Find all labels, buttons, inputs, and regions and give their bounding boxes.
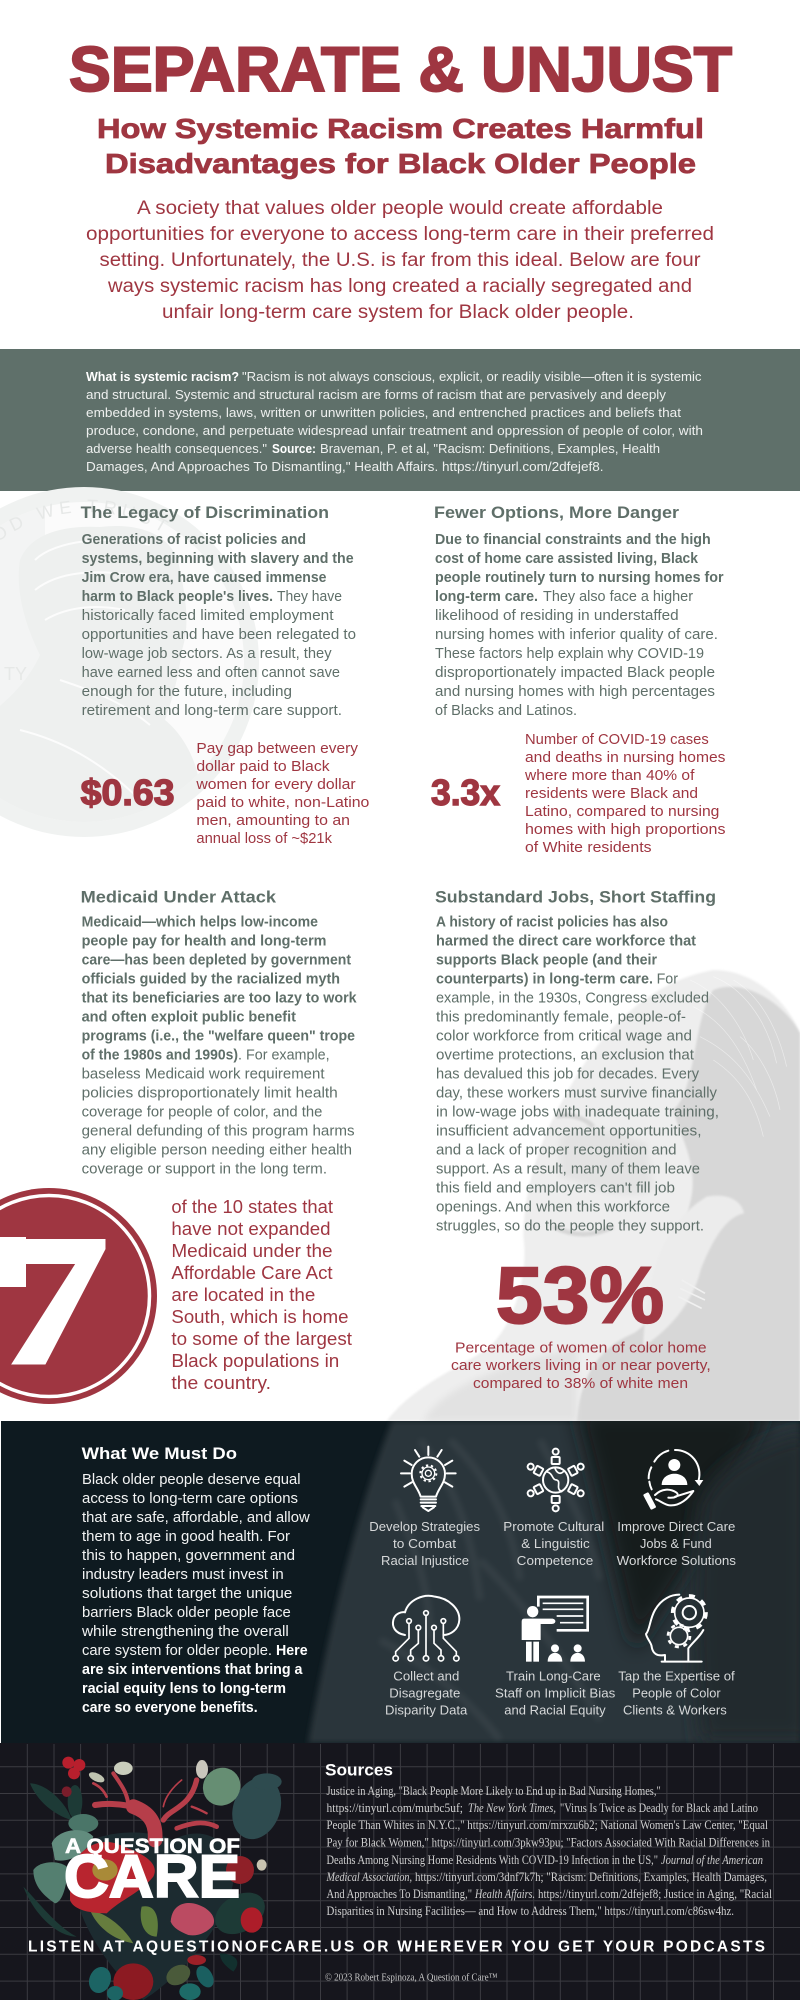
body text: harm to Black people's lives.: [82, 589, 273, 605]
body text: has devalued this job for decades. Every: [436, 1066, 700, 1082]
icon: light bulb with gear: [401, 1447, 456, 1511]
body text: people routinely turn to nursing homes for: [435, 570, 724, 586]
stat: pay gap: women for every dollar: [195, 777, 356, 793]
body text: officials guided by the racialized myth: [82, 972, 340, 988]
body text: . For example,: [238, 1048, 330, 1064]
body text: [436, 914, 719, 1234]
body text: insufficient advancement opportunities,: [436, 1124, 702, 1140]
stat text: states not expanded: are located in the: [171, 1285, 315, 1305]
panel: what is systemic racism: "Racism is not always conscious, explicit, or readily visible—often it is systemic: [242, 370, 702, 384]
panel: what is systemic racism: adverse health consequences.": [86, 442, 267, 456]
sources text: And Approaches To Dismantling,": [326, 1887, 472, 1901]
body text: example, in the 1930s, Congress excluded: [436, 990, 709, 1006]
illustration: woman photo background: [387, 970, 800, 1421]
panel: what is systemic racism: and structural. Systemic and structural racism are forms of racism that are pervasively and deeply: [86, 388, 667, 402]
body text: this predominantly female, people-of-: [436, 1010, 686, 1026]
body text: of the 1980s and 1990s): [82, 1048, 238, 1064]
body text: They have: [277, 589, 342, 605]
body text: [82, 532, 356, 719]
stat: pay gap: annual loss of ~$21k: [196, 831, 333, 847]
icon labels: [369, 1519, 737, 1718]
sources text: Health Affairs.: [474, 1887, 535, 1901]
body text: and nursing homes with high percentages: [435, 684, 715, 700]
body text: [82, 914, 358, 1178]
body text: disproportionately impacted Black people: [435, 665, 715, 681]
body text: openings. And when this workforce: [436, 1200, 670, 1216]
stat: 7 badge: [0, 1188, 157, 1404]
call to action: LISTEN AT AQUESTIONOFCARE.US OR WHEREVER YOU GET YOUR PODCASTS: [28, 1939, 765, 1956]
icon labels: Staff on Implicit Bias: [495, 1686, 616, 1701]
body text: They also face a higher: [543, 589, 693, 605]
panel: what is systemic racism: [0, 349, 800, 491]
stat: covid cases: homes with high proportions: [525, 822, 726, 838]
icon labels: Collect and: [393, 1669, 459, 1684]
body text: low-wage job sectors. As a result, they: [82, 646, 332, 662]
icon labels: and Racial Equity: [504, 1703, 606, 1718]
stat caption: [451, 1340, 711, 1392]
subtitle: Disadvantages for Black Older People: [105, 148, 696, 179]
body text: For: [657, 972, 678, 988]
photo: shoulder background: [308, 1410, 800, 1743]
body text: in low-wage jobs with inadequate training,: [436, 1104, 719, 1120]
panel: what is systemic racism: Damages, And Approaches To Dismantling," Health Affairs. https://tinyurl.com/2dfejef8.: [86, 460, 604, 474]
body text: coverage for people of color, and the: [82, 1104, 322, 1120]
panel: footer: [0, 1743, 800, 2000]
body text: These factors help explain why COVID-19: [435, 646, 704, 662]
sources: [325, 1761, 772, 1918]
body text: barriers Black older people face: [82, 1605, 291, 1621]
stat text: states not expanded: [171, 1197, 352, 1393]
icon grid: [393, 1447, 706, 1662]
body text: historically faced limited employment: [82, 608, 334, 624]
stat: covid cases: and deaths in nursing homes: [525, 750, 726, 766]
body text: industry leaders must invest in: [82, 1567, 284, 1583]
icon labels: Clients & Workers: [623, 1703, 727, 1718]
body text: Generations of racist policies and: [82, 532, 306, 548]
panel: what is systemic racism: What is systemic racism?: [86, 370, 239, 384]
body text: Black older people deserve equal: [82, 1472, 300, 1488]
stat text: states not expanded: have not expanded: [171, 1219, 331, 1239]
section: the legacy of discrimination: [81, 504, 369, 847]
sources text: https://tinyurl.com/2dfejef8; Justice in Aging, "Racial: [538, 1887, 772, 1901]
stat caption: compared to 38% of white men: [473, 1376, 688, 1392]
body text: coverage or support in the long term.: [82, 1162, 327, 1178]
body text: long-term care.: [435, 589, 538, 605]
icon labels: Disparity Data: [385, 1703, 468, 1718]
icon labels: Develop Strategies: [369, 1519, 480, 1534]
intro paragraph: setting. Unfortunately, the U.S. is far from this ideal. Below are four: [100, 250, 701, 271]
body text: policies disproportionately limit health: [82, 1086, 338, 1102]
illustration: penny background: TY: [4, 664, 27, 684]
sources text: Justice in Aging, "Black People More Likely to End up in Bad Nursing Homes,": [326, 1784, 661, 1798]
heading: The Legacy of Discrimination: [81, 504, 329, 522]
body text: opportunities and have been relegated to: [82, 627, 356, 643]
body text: any eligible person needing either health: [82, 1142, 352, 1158]
body text: likelihood of residing in understaffed: [435, 608, 679, 624]
body text: people pay for health and long-term: [82, 934, 326, 950]
stat: covid cases: Number of COVID-19 cases: [525, 732, 709, 748]
sources heading: Sources: [325, 1761, 393, 1780]
icon: globe with people: [526, 1449, 585, 1511]
body text: overtime protections, an exclusion that: [436, 1048, 694, 1064]
body text: racial equity lens to long-term: [82, 1681, 286, 1697]
body text: that its beneficiaries are too lazy to work: [82, 990, 358, 1006]
sources text: [326, 1784, 772, 1918]
body text: care system for older people.: [82, 1643, 272, 1659]
subtitle: How Systemic Racism Creates Harmful: [97, 113, 704, 144]
stat: covid cases: 3.3x: [431, 772, 500, 813]
body text: harmed the direct care workforce that: [436, 934, 696, 950]
icon labels: Disagregate: [389, 1686, 460, 1701]
intro paragraph: unfair long-term care system for Black older people.: [162, 302, 634, 323]
logo: a question of care: CARE: [64, 1843, 240, 1910]
sources text: Disparities in Nursing Facilities— and How to Address Them," https://tinyurl.com/c86sw4hz.: [326, 1904, 734, 1918]
stat: covid cases: [431, 732, 726, 856]
stat: covid cases: Latino, compared to nursing: [525, 804, 719, 820]
panel: what is systemic racism: Source:: [272, 442, 316, 456]
body text: have earned less and often cannot save: [82, 665, 340, 681]
body text: day, these workers must survive financially: [436, 1086, 718, 1102]
section: medicaid under attack: [0, 888, 358, 1404]
panel: what is systemic racism: produce, condone, and perpetuate widespread unfair treatment and oppression of people of color, with: [86, 424, 703, 438]
illustration: penny background: [0, 487, 259, 837]
panel: what is systemic racism: Braveman, P. et al, "Racism: Definitions, Examples, Health: [320, 442, 660, 456]
body text: and often exploit public benefit: [82, 1010, 296, 1026]
section: fewer options, more danger: [431, 504, 726, 856]
stat: pay gap: paid to white, non-Latino: [196, 795, 369, 811]
stat: covid cases: where more than 40% of: [524, 768, 695, 784]
icon labels: Improve Direct Care: [617, 1519, 735, 1534]
stat text: states not expanded: to some of the largest: [171, 1329, 352, 1349]
body text: care so everyone benefits.: [82, 1700, 258, 1716]
stat text: states not expanded: Affordable Care Act: [171, 1263, 333, 1283]
body text: this to happen, government and: [82, 1548, 295, 1564]
intro paragraph: opportunities for everyone to access long-term care in their preferred: [86, 224, 714, 245]
copyright: © 2023 Robert Espinoza, A Question of Care™: [325, 1973, 498, 1984]
icon labels: Promote Cultural: [503, 1519, 604, 1534]
icon: cloud data circuit: [393, 1596, 459, 1661]
icon labels: & Linguistic: [521, 1536, 590, 1551]
body text: Due to financial constraints and the high: [435, 532, 711, 548]
icon labels: People of Color: [632, 1686, 721, 1701]
body text: Here: [276, 1643, 308, 1659]
stat text: states not expanded: Black populations in: [171, 1351, 339, 1371]
body text: supports Black people (and their: [436, 952, 657, 968]
stat: pay gap: dollar paid to Black: [196, 759, 330, 775]
body text: care—has been depleted by government: [82, 952, 351, 968]
icon: care cycle with hand: [643, 1450, 703, 1510]
intro paragraph: ways systemic racism has long created a racially segregated and: [107, 276, 692, 297]
body text: programs (i.e., the "welfare queen" trope: [82, 1028, 355, 1044]
icon labels: Racial Injustice: [381, 1553, 469, 1568]
stat: pay gap: [81, 741, 369, 847]
body text: [435, 532, 724, 719]
stat: pay gap: Pay gap between every: [196, 741, 359, 757]
body text: A history of racist policies has also: [436, 914, 668, 930]
body text: baseless Medicaid work requirement: [82, 1066, 324, 1082]
sources text: Journal of the American: [661, 1853, 763, 1867]
body text: support. As a result, many of them leave: [436, 1162, 700, 1178]
body text: [81, 1472, 310, 1716]
body text: solutions that target the unique: [82, 1586, 292, 1602]
heading: Fewer Options, More Danger: [434, 504, 680, 522]
title: SEPARATE & UNJUST: [69, 35, 732, 105]
body text: access to long-term care options: [82, 1491, 298, 1507]
icon labels: Tap the Expertise of: [618, 1669, 735, 1684]
stat text: states not expanded: Medicaid under the: [171, 1241, 333, 1261]
body text: Medicaid—which helps low-income: [82, 914, 318, 930]
intro paragraph: A society that values older people would create affordable: [137, 198, 663, 219]
body text: are six interventions that bring a: [82, 1662, 303, 1678]
stat text: states not expanded: South, which is home: [171, 1307, 348, 1327]
stat: 53 percent: 53%: [496, 1250, 664, 1340]
logo: a question of care: A QUESTION OF: [65, 1835, 240, 1858]
body text: them to age in good health. For: [82, 1529, 290, 1545]
body text: this field and employers can't fill job: [436, 1180, 675, 1196]
sources text: Deaths Among Nursing Home Residents With COVID-19 Infection in the US,": [326, 1853, 658, 1867]
stat: pay gap: men, amounting to an: [196, 813, 350, 829]
sources text: "Virus Is Twice as Deadly for Black and Latino: [560, 1801, 758, 1815]
body text: enough for the future, including: [82, 684, 292, 700]
body text: struggles, so do the people they support.: [436, 1218, 704, 1234]
subtitle: [97, 113, 704, 179]
icon labels: Competence: [517, 1553, 593, 1568]
icon: trainer with audience: [522, 1597, 588, 1662]
body text: while strengthening the overall: [81, 1624, 289, 1640]
section: substandard jobs, short staffing: [435, 888, 719, 1392]
icon labels: Workforce Solutions: [617, 1553, 737, 1568]
stat: pay gap: $0.63: [81, 772, 174, 813]
body text: retirement and long-term care support.: [82, 703, 342, 719]
body text: counterparts) in long-term care.: [436, 972, 653, 988]
heading: What We Must Do: [82, 1444, 237, 1463]
stat caption: Percentage of women of color home: [455, 1340, 707, 1356]
body text: nursing homes with inferior quality of care.: [435, 627, 718, 643]
body text: of Blacks and Latinos.: [435, 703, 577, 719]
body text: Jim Crow era, have caused immense: [82, 570, 326, 586]
body text: that are safe, affordable, and allow: [82, 1510, 310, 1526]
panel: what is systemic racism: embedded in systems, laws, written or unwritten policies, and entrenched practices and beliefs that: [86, 406, 682, 420]
sources text: https://tinyurl.com/murbc5uf;: [326, 1801, 463, 1815]
body text: and a lack of proper recognition and: [436, 1142, 676, 1158]
stat: covid cases: residents were Black and: [525, 786, 698, 802]
stat caption: care workers living in or near poverty,: [451, 1358, 711, 1374]
body text: systems, beginning with slavery and the: [82, 551, 354, 567]
icon labels: Jobs & Fund: [640, 1536, 712, 1551]
stat text: states not expanded: the country.: [171, 1373, 271, 1393]
illustration: floral anatomical heart: [23, 1757, 289, 2000]
body text: general defunding of this program harms: [82, 1124, 355, 1140]
panel: what we must do: [1, 1410, 800, 1743]
sources text: Medical Association,: [326, 1870, 412, 1884]
intro paragraph: [86, 198, 714, 323]
icon labels: Train Long-Care: [506, 1669, 601, 1684]
heading: Substandard Jobs, Short Staffing: [435, 888, 716, 906]
icon: head with gears: [646, 1595, 706, 1662]
stat: covid cases: of White residents: [525, 840, 652, 856]
icon labels: to Combat: [393, 1536, 456, 1551]
body text: cost of home care assisted living, Black: [435, 551, 699, 567]
body text: color workforce from critical wage and: [436, 1028, 692, 1044]
heading: Medicaid Under Attack: [81, 888, 277, 906]
stat text: states not expanded: of the 10 states that: [171, 1197, 333, 1217]
sources text: The New York Times,: [468, 1801, 556, 1815]
